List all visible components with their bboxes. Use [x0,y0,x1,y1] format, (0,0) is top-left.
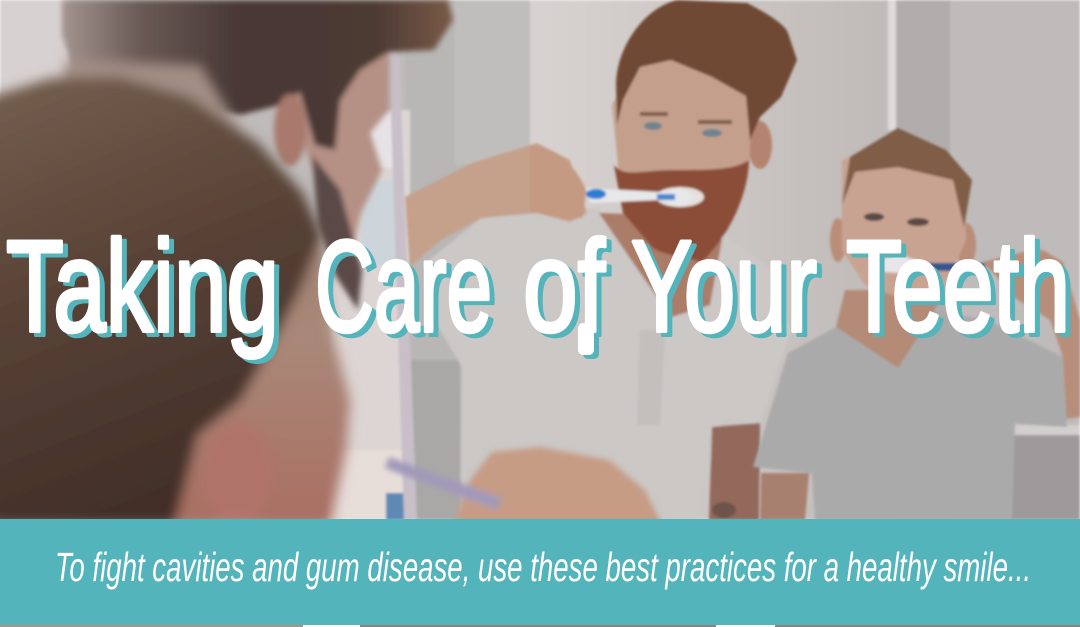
title with teal drop shadow [6,213,1075,363]
title shadow: of [528,217,611,363]
foreground: son's head from behind [0,60,350,525]
father's skin from behind [285,50,389,250]
father's fist overlap [530,145,586,220]
father's lower arm [709,423,760,520]
title shadow: Care [320,217,497,363]
title text: of [523,213,606,359]
son's eyes [864,213,929,226]
teal subtitle banner [0,519,1080,625]
neck skin above head [60,60,240,130]
son's fist [982,248,1050,300]
son's ears [830,218,976,267]
son in the mirror [753,128,1080,520]
foreground: father's head from behind [62,0,453,310]
father's shirt [427,208,791,520]
father's ear [748,121,772,169]
son's lower arm [760,473,809,520]
father's hair from behind [62,0,453,150]
ear [204,421,272,525]
son's hair [842,128,972,227]
father's mouth [656,187,704,207]
title text: Taking [6,213,279,359]
father's eyes [644,122,722,137]
title shadow: Your [636,217,822,363]
father's brows [640,112,732,124]
father's shirt placket [637,330,665,425]
father's tattoo [712,502,736,518]
son's face [842,140,966,300]
father's toothbrush [586,188,695,207]
father's neck [599,213,722,317]
title shadow [11,217,1075,363]
son's raised arm [1010,250,1080,420]
father's face [612,55,752,205]
son's shirt [753,310,1067,520]
title text: Care [315,213,492,359]
father's raised arm [405,143,587,267]
foreground: hand and toothbrush [385,447,662,525]
title text: Your [631,213,817,359]
title shadow: Taking [11,217,284,363]
head skin [140,150,350,525]
father in the mirror [405,0,797,520]
father's hair [616,0,797,140]
father's beard from behind [312,155,362,310]
father's beard [614,160,749,262]
son's mouth and toothbrush [876,255,985,273]
hair [0,77,322,525]
son's neck [836,290,945,368]
title text [6,213,1070,359]
father's ear from behind [274,94,306,166]
